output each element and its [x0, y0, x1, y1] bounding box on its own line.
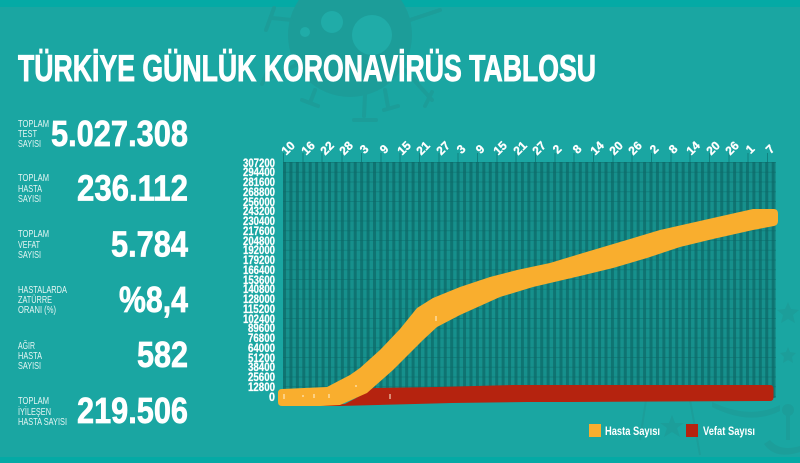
y axis labels: 153600	[243, 275, 275, 287]
x axis labels: 15	[490, 138, 510, 158]
legend: vefat sayisi: Vefat Sayısı	[703, 426, 755, 438]
x axis labels: 22	[317, 138, 337, 158]
top band	[0, 0, 800, 7]
chart	[243, 138, 778, 406]
y axis labels: 204800	[243, 236, 275, 248]
stat: toplam iyilesen: HASTA SAYISI	[18, 416, 67, 428]
x axis labels: 26	[722, 138, 742, 158]
y axis labels: 51200	[248, 353, 275, 365]
x axis labels: 2	[550, 142, 565, 156]
y axis labels: 281600	[243, 177, 275, 189]
y axis labels: 166400	[243, 265, 275, 277]
x axis labels: 7	[763, 142, 778, 156]
stat: zaturre orani: %8,4	[119, 279, 188, 320]
x axis labels	[278, 138, 778, 158]
stat: toplam hasta: 236.112	[77, 168, 188, 208]
x axis labels: 27	[433, 138, 453, 158]
x axis labels: 14	[587, 138, 607, 158]
stat: toplam test: TOPLAM	[18, 118, 49, 130]
y axis labels: 102400	[243, 314, 275, 326]
y axis labels: 89600	[248, 323, 275, 335]
legend: vefat sayisi	[686, 424, 755, 438]
y axis labels: 0	[269, 392, 275, 404]
x axis labels: 3	[454, 142, 469, 156]
x axis labels: 16	[298, 138, 318, 158]
x axis labels: 21	[510, 138, 530, 158]
stat: toplam iyilesen: 219.506	[77, 390, 188, 431]
plot area	[283, 162, 776, 398]
legend: hasta sayisi: Hasta Sayısı	[605, 426, 660, 438]
stat: agir hasta: SAYISI	[18, 360, 41, 372]
hasta series	[278, 209, 778, 406]
y axis labels: 76800	[248, 333, 275, 345]
y axis labels: 268800	[243, 187, 275, 199]
virus watermark	[262, 0, 440, 120]
x axis labels: 21	[413, 138, 433, 158]
y axis labels: 192000	[243, 245, 275, 257]
title: TÜRKİYE GÜNLÜK KORONAVİRÜS TABLOSU	[18, 48, 596, 89]
emblem watermark	[640, 302, 800, 455]
stat: zaturre orani: ZATÜRRE	[18, 294, 52, 306]
vefat series	[320, 385, 774, 406]
stat: zaturre orani: HASTALARDA	[18, 284, 67, 296]
stat: toplam hasta: HASTA	[18, 183, 42, 195]
x axis labels: 28	[336, 138, 356, 158]
x axis labels: 26	[625, 138, 645, 158]
y axis labels	[243, 158, 275, 404]
stat: agir hasta: 582	[137, 334, 188, 375]
x axis labels: 9	[377, 142, 392, 156]
x axis labels: 9	[473, 142, 488, 156]
stat: toplam vefat: SAYISI	[18, 249, 41, 261]
y axis labels: 64000	[248, 343, 275, 355]
y axis labels: 140800	[243, 284, 275, 296]
stat: toplam test: 5.027.308	[51, 113, 188, 154]
y axis labels: 179200	[243, 255, 275, 267]
y axis labels: 256000	[243, 197, 275, 209]
x axis labels: 8	[666, 142, 681, 156]
x axis labels: 1	[743, 142, 758, 156]
stat: toplam vefat: 5.784	[111, 224, 188, 264]
x axis labels: 15	[394, 138, 414, 158]
x axis labels: 27	[529, 138, 549, 158]
stat: toplam iyilesen: TOPLAM	[18, 395, 49, 407]
data point ticks	[284, 316, 436, 399]
y axis labels: 25600	[248, 372, 275, 384]
stat: toplam hasta: TOPLAM	[18, 172, 49, 184]
x axis labels: 10	[278, 138, 298, 158]
stat: toplam vefat: VEFAT	[18, 239, 40, 251]
x axis ticks	[284, 153, 768, 162]
x axis labels: 14	[683, 138, 703, 158]
stat: zaturre orani: ORANI (%)	[18, 304, 56, 316]
y axis labels: 115200	[243, 304, 275, 316]
y axis labels: 230400	[243, 216, 275, 228]
stat: agir hasta: AĞIR	[18, 339, 35, 352]
stat: agir hasta	[18, 334, 188, 375]
x axis labels: 20	[606, 138, 626, 158]
stat: toplam iyilesen: İYİLEŞEN	[18, 405, 51, 418]
stat: toplam iyilesen	[18, 390, 188, 431]
stat: toplam hasta: SAYISI	[18, 193, 41, 205]
stat: zaturre orani	[18, 279, 188, 320]
stat: toplam hasta	[18, 168, 188, 208]
y axis labels: 38400	[248, 362, 275, 374]
x axis labels: 20	[703, 138, 723, 158]
x axis labels: 2	[647, 142, 662, 156]
y axis labels: 217600	[243, 226, 275, 238]
legend: hasta sayisi	[589, 424, 660, 438]
stat: toplam vefat: TOPLAM	[18, 228, 49, 240]
y axis labels: 294400	[243, 167, 275, 179]
stat: agir hasta: HASTA	[18, 350, 42, 362]
bottom band	[0, 457, 800, 463]
x axis labels: 3	[357, 142, 372, 156]
y axis labels: 307200	[243, 158, 275, 170]
stat: toplam test: TEST	[18, 128, 37, 140]
x axis labels: 8	[570, 142, 585, 156]
y axis labels: 128000	[243, 294, 275, 306]
y axis labels: 243200	[243, 206, 275, 218]
stat: toplam vefat	[18, 224, 188, 264]
stat: toplam test: SAYISI	[18, 138, 41, 150]
y axis labels: 12800	[248, 382, 275, 394]
